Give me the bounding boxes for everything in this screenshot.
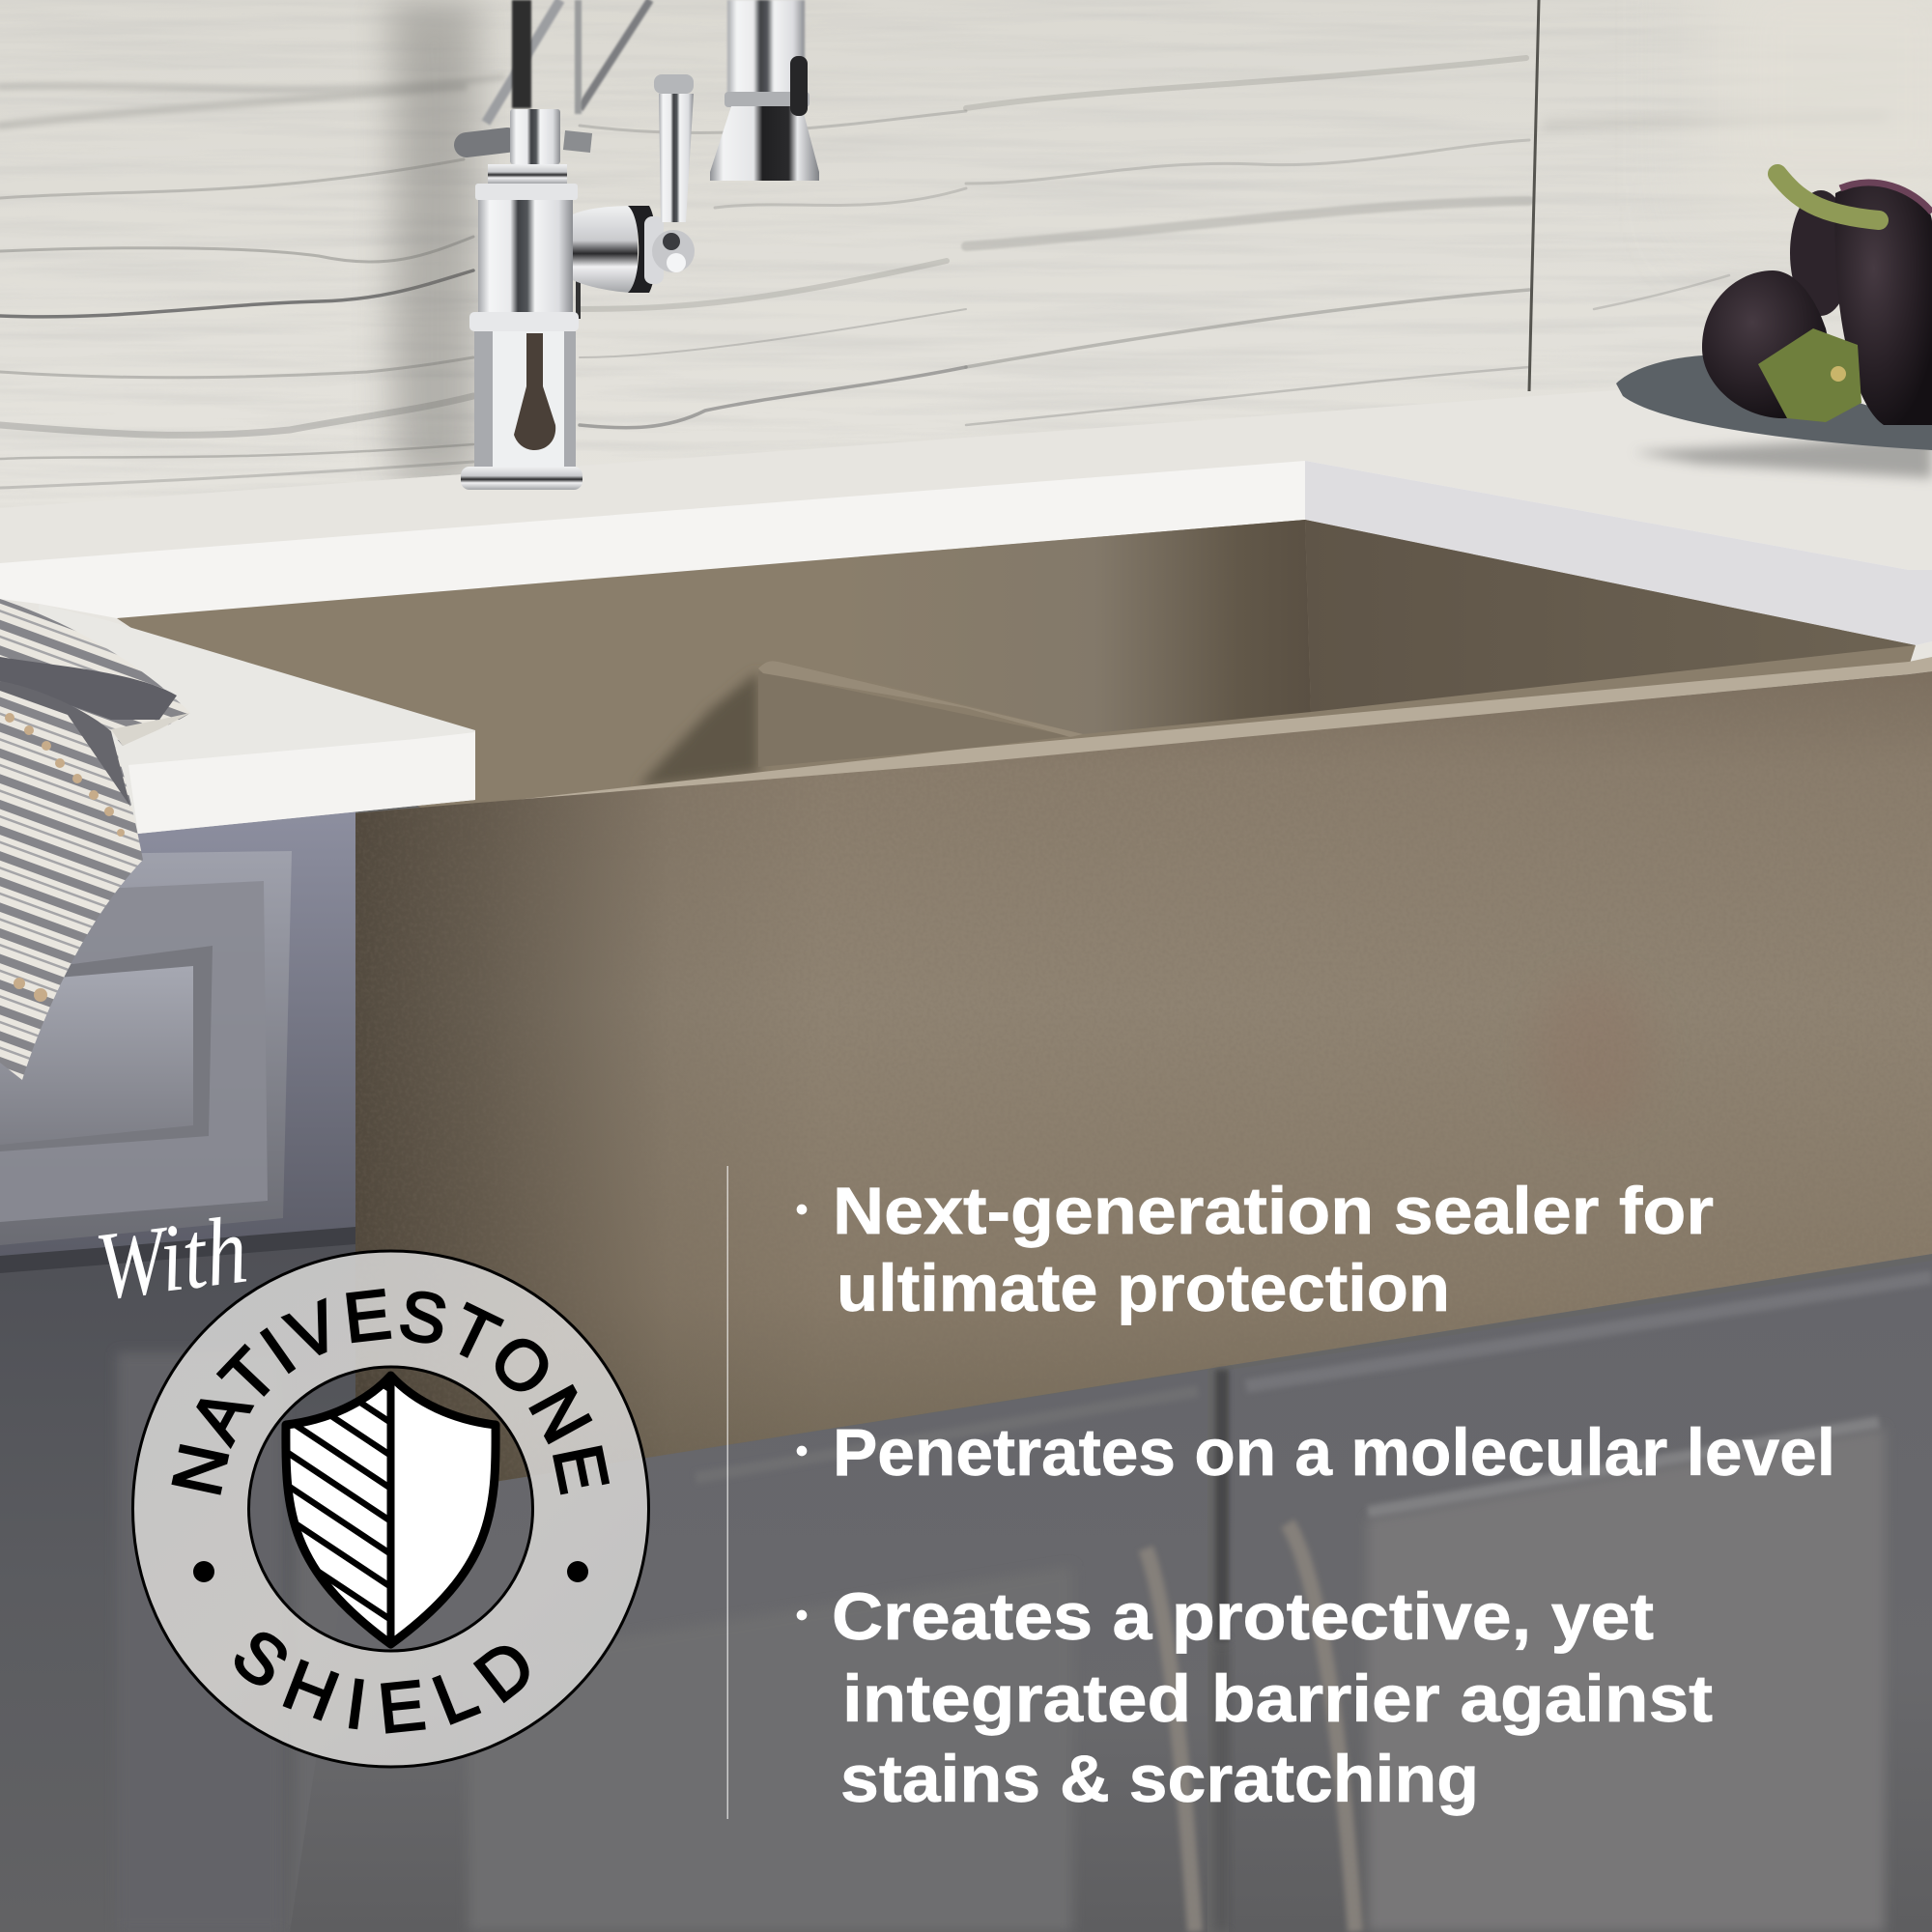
NativeStone Shield badge [131,1250,650,1768]
door top frame highlights [1246,1277,1932,1386]
badge dots [193,1561,588,1582]
handwritten With: With [90,1196,253,1321]
towel dots [5,713,125,1002]
left cabinet drawer [0,792,355,1275]
rods [486,0,560,123]
left countertop with edge [39,604,475,834]
door handles [1146,1548,1195,1932]
chrome faucet [461,0,695,490]
bullet 1: sealer: ultimate protection [837,1251,1450,1325]
soft shadow behind faucet [386,0,478,483]
marble backsplash wall [0,0,1932,522]
sink basin interior [117,520,1916,813]
benefit list [797,1174,1835,1816]
spout [573,206,638,293]
bullet 3: barrier: integrated barrier against [842,1662,1713,1736]
bullet 3: barrier: stains & scratching [840,1742,1479,1816]
striped towel [0,599,190,1080]
arms [467,140,507,145]
badge text bottom: SHIELD [235,1633,529,1734]
bullet 3: barrier [797,1579,1713,1816]
badge ring [133,1251,649,1767]
spray head [710,0,819,181]
vertical divider line [726,1166,728,1819]
door inset panels [469,1566,1072,1932]
plate with eggplants [1616,174,1932,478]
blurred top right wall [1702,11,1932,176]
sink concrete apron [355,667,1932,1517]
sink front rim [431,657,1932,815]
lower cabinet doors [290,1261,1932,1932]
bullet 1: sealer: Next-generation sealer for [833,1174,1714,1248]
bullet 3: barrier: Creates a protective, yet [832,1579,1654,1654]
bullet 2: penetrates: Penetrates on a molecular level [833,1415,1835,1490]
badge text top: NATIVESTONE [171,1289,611,1495]
white countertop [0,367,1932,676]
left cabinet lower door [0,1244,469,1932]
bullet 1: sealer [797,1174,1714,1325]
shield icon [281,1372,500,1649]
